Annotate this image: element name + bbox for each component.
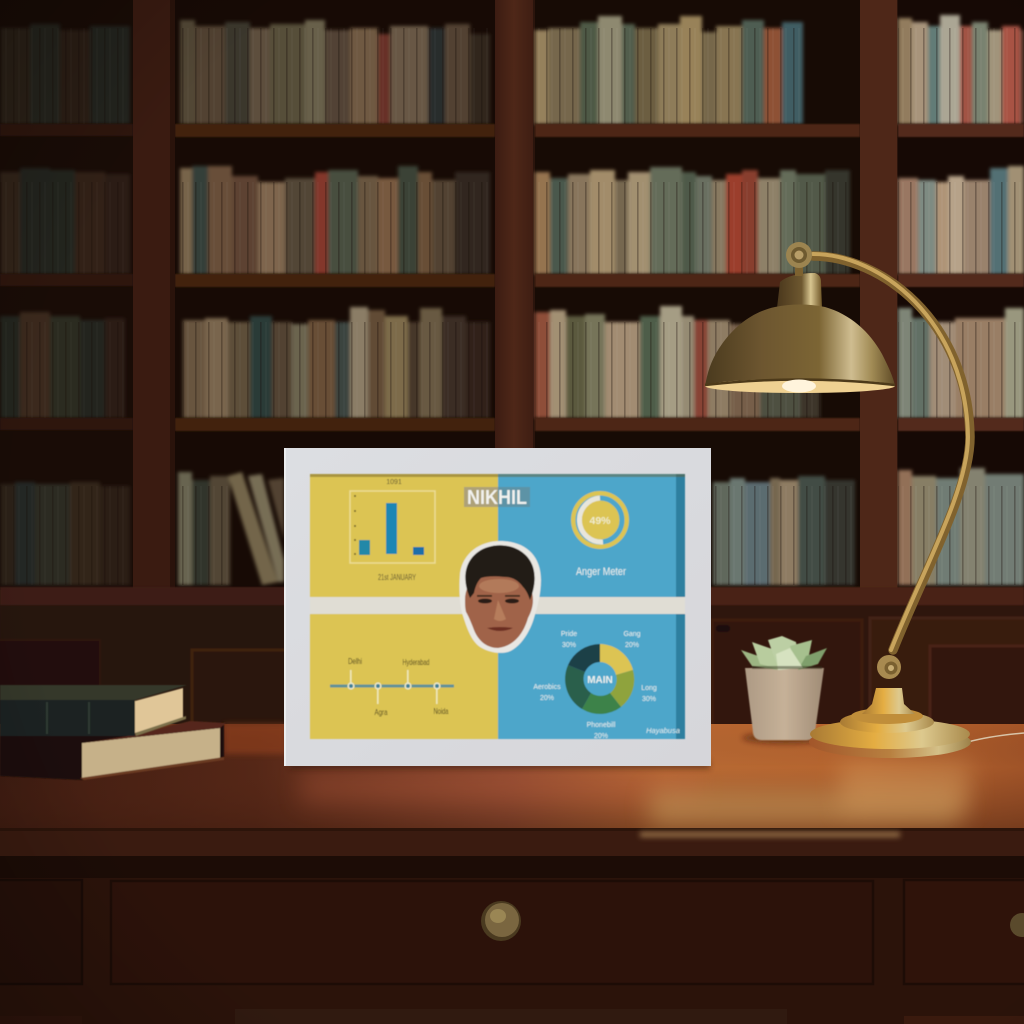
book spine detail [0,28,1024,585]
blue panels [498,474,685,739]
desk front edge [0,828,1024,880]
hair [465,545,535,600]
eyes and brows [477,595,520,603]
donut labels: Gang [623,631,641,638]
pot [745,668,824,740]
desk [0,724,1024,1024]
donut labels: 30% [562,642,576,649]
timeline labels: Hyderabad [402,658,430,667]
desk lamp [705,242,1024,758]
desk front panel [0,878,1024,1024]
anger meter gauge: 49% [589,515,611,527]
nodes [348,683,440,689]
lamp shade [705,304,895,386]
lamp arm [813,254,970,650]
mouth [487,627,513,631]
top green book [0,685,187,736]
donut labels: 20% [625,642,639,649]
gauge label: Anger Meter [576,566,626,578]
timeline labels: Delhi [348,657,362,666]
edge highlight [640,832,900,837]
lower cabinet with ledge and doors [0,587,1024,733]
centre drawer [111,881,873,984]
donut labels: 20% [594,733,608,740]
face skin [465,570,533,648]
nose [494,600,506,621]
column 2 [180,20,195,124]
shade lit rim [705,379,895,393]
bookcase background [0,0,1024,733]
sticker outline [459,541,541,653]
donut centre label: MAIN [587,675,613,686]
frame shadow [290,760,710,769]
donut labels [533,631,657,740]
column 1 [0,28,30,124]
donut labels: Phonebill [587,722,616,729]
yellow panels [310,474,498,739]
brass knob [481,901,521,941]
frame border [284,448,711,766]
donut chart [533,631,680,740]
white divider band [310,597,685,614]
shelf niches [0,0,1024,590]
plant pot with succulent [741,636,830,744]
timeline labels: Agra [374,708,388,717]
name label: NIKHIL [467,487,527,509]
axis ticks [354,495,356,555]
picture frame [284,448,711,769]
donut labels: Aerobics [533,684,561,691]
right drawer [904,880,1024,984]
bulb [782,380,816,392]
anger meter gauge [571,491,629,578]
bookcase uprights [133,0,897,590]
bottom brown book [0,721,226,780]
chart title: 1091 [386,479,402,486]
timeline labels: Noida [434,707,449,716]
face sticker portrait [459,541,541,653]
donut labels: 30% [642,696,656,703]
dim light over book columns [0,0,1024,590]
lower drawers [0,1009,1024,1024]
right knob [1010,913,1024,937]
timeline [330,657,454,717]
donut labels: 20% [540,695,554,702]
column 4 [898,18,912,124]
shelf boards [0,124,1024,431]
timeline labels [348,657,449,717]
infographic artwork [310,474,685,740]
left drawer [0,880,82,984]
donut labels: Long [641,685,657,692]
lamp neck [777,264,822,308]
stems [350,670,438,704]
stacked books [0,685,226,780]
power cord [968,733,1024,742]
bar chart [350,479,435,582]
lit wood at back of desk [224,724,286,754]
chart date: 21st JANUARY [378,573,416,582]
lamp reflection on desk [650,790,960,826]
succulent [741,636,827,670]
lamp knuckle [786,242,812,268]
column 3 [535,30,548,124]
signature: Hayabusa [646,726,680,735]
desk top [0,724,1024,832]
frame reflection on desk [300,770,700,804]
forehead highlight [479,579,519,593]
books [0,15,1024,585]
bars [359,503,424,555]
lamp base [809,655,971,758]
donut labels: Pride [561,631,577,638]
